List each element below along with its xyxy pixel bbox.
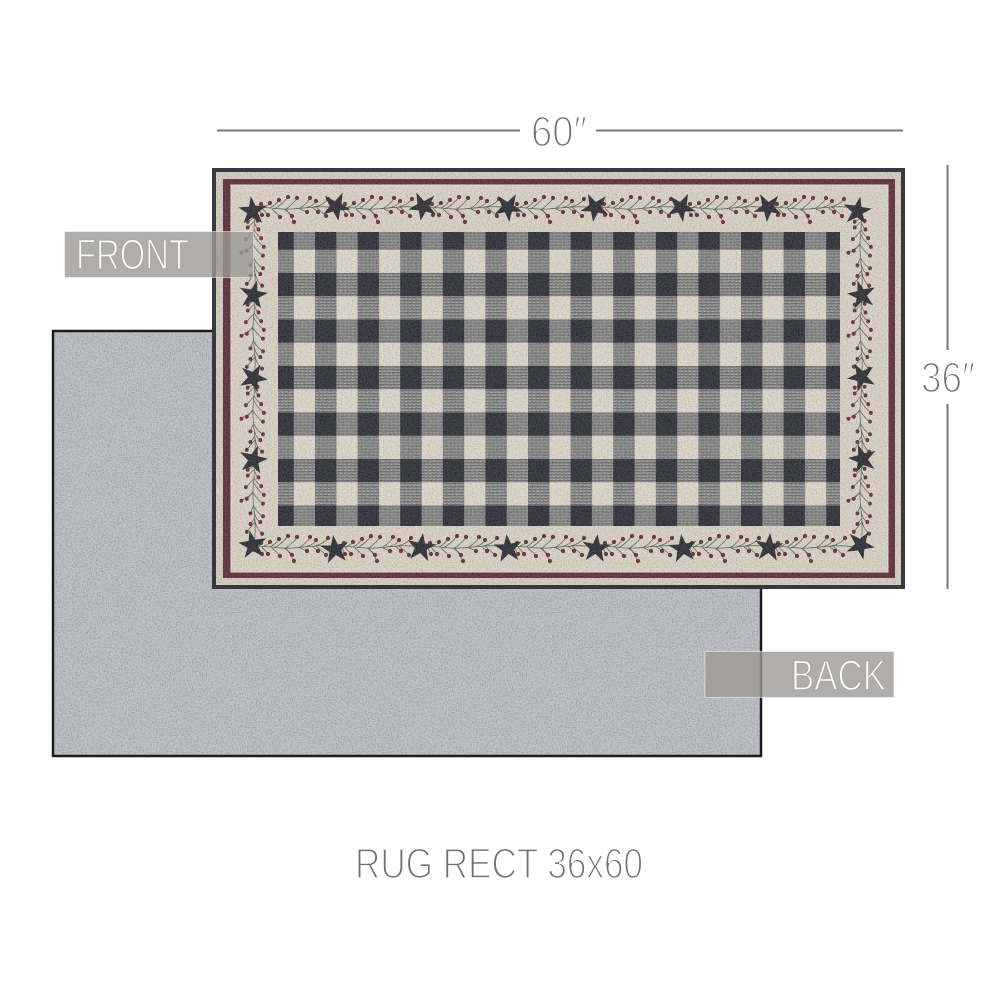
- bottom vines: [252, 534, 855, 563]
- product title: RUG RECT 36x60: [355, 840, 643, 888]
- rug front: [212, 168, 905, 589]
- outer border: [212, 168, 905, 589]
- label: front: FRONT: [76, 231, 189, 279]
- width dimension: 60 inches: 60″: [531, 108, 587, 156]
- rug back: [53, 331, 761, 756]
- left vines: [240, 212, 266, 543]
- height dimension: 36 inches: 36″: [921, 354, 975, 402]
- top vines: [252, 195, 854, 224]
- border field: [231, 185, 888, 572]
- label: back: BACK: [791, 652, 886, 700]
- weave texture: [216, 172, 901, 585]
- right vines: [847, 212, 873, 543]
- stars: [235, 192, 877, 564]
- maroon stripe: [223, 179, 895, 578]
- buffalo check field: [278, 232, 840, 526]
- label: back: [705, 652, 894, 700]
